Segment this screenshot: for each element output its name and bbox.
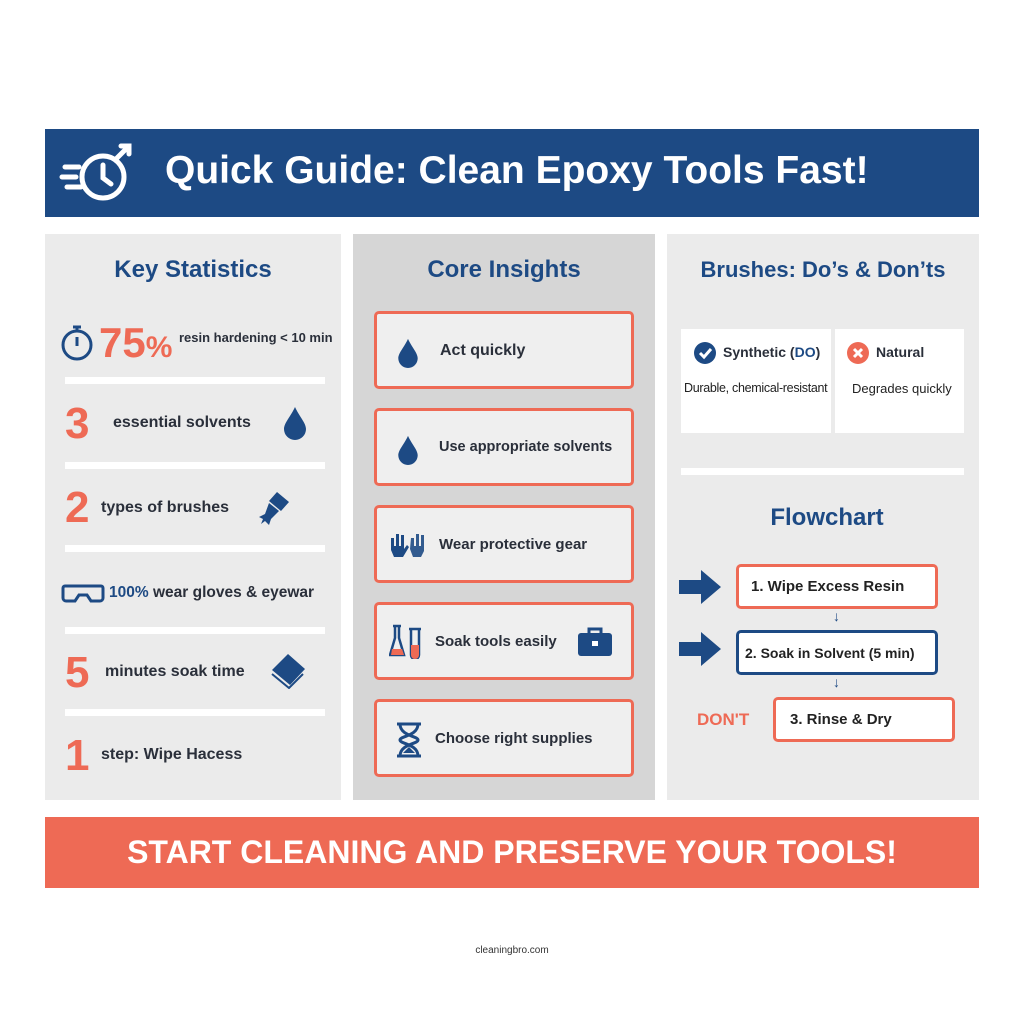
stat 5 minutes bbox=[65, 648, 305, 697]
stat 2 brushes: 2 bbox=[65, 483, 89, 532]
step 1: 1. Wipe Excess Resin bbox=[751, 578, 904, 595]
stat 3 solvents: 3 bbox=[65, 399, 89, 448]
stat 75%: resin hardening < 10 min bbox=[179, 330, 333, 345]
stat 1 step: 1 bbox=[65, 731, 89, 780]
box: natural DON'T bbox=[835, 329, 964, 433]
card: act quickly: Act quickly bbox=[440, 342, 525, 359]
icon: fast clock bbox=[60, 144, 132, 200]
stat 2 brushes: types of brushes bbox=[101, 499, 229, 516]
stat 5 minutes: 5 bbox=[65, 648, 89, 697]
card: solvents: Use appropriate solvents bbox=[439, 439, 612, 455]
header banner bbox=[45, 129, 979, 217]
stat 3 solvents: essential solvents bbox=[113, 414, 251, 431]
flowchart: ↓ bbox=[833, 608, 840, 624]
step 2 bbox=[736, 630, 938, 675]
panel: brushes and flowchart bbox=[667, 234, 979, 800]
box: synthetic DO bbox=[681, 329, 831, 433]
step 3 bbox=[773, 697, 955, 742]
heading: Key Statistics bbox=[114, 256, 272, 283]
box: synthetic DO: Durable, chemical-resistant bbox=[684, 381, 827, 395]
step 1 bbox=[736, 564, 938, 609]
panel: key statistics bbox=[45, 234, 341, 800]
footer banner bbox=[45, 817, 979, 888]
card: protective gear: Wear protective gear bbox=[439, 536, 587, 553]
stat 5 minutes: minutes soak time bbox=[105, 663, 245, 680]
title: Quick Guide: Clean Epoxy Tools Fast! bbox=[165, 149, 869, 192]
flowchart: ↓ bbox=[833, 674, 840, 690]
stat 75% bbox=[62, 319, 333, 366]
heading: Core Insights bbox=[427, 256, 581, 283]
arrow 2 bbox=[679, 632, 721, 666]
arrow 1 bbox=[679, 570, 721, 604]
footer banner: START CLEANING AND PRESERVE YOUR TOOLS! bbox=[127, 834, 897, 870]
panel: core insights bbox=[353, 234, 655, 800]
card: soak tools: Soak tools easily bbox=[435, 633, 557, 650]
stat 75%: 75% bbox=[99, 319, 172, 366]
card: solvents bbox=[374, 408, 634, 486]
card: protective gear bbox=[374, 505, 634, 583]
stat 3 solvents bbox=[65, 399, 306, 448]
stat 100%: 100% wear gloves & eyewar bbox=[109, 584, 314, 601]
stat 1 step bbox=[65, 731, 242, 780]
flowchart heading: Flowchart bbox=[770, 504, 884, 531]
box: natural DON'T: Degrades quickly bbox=[852, 381, 952, 396]
source: cleaningbro.com bbox=[475, 945, 549, 956]
card: supplies bbox=[374, 699, 634, 777]
box: synthetic DO: Synthetic (DO) bbox=[723, 344, 820, 360]
don't label: DON'T bbox=[697, 710, 749, 729]
heading: Brushes: Do’s & Don’ts bbox=[701, 257, 945, 282]
card: act quickly bbox=[374, 311, 634, 389]
step 3: 3. Rinse & Dry bbox=[790, 711, 892, 728]
card: soak tools bbox=[374, 602, 634, 680]
step 2: 2. Soak in Solvent (5 min) bbox=[745, 644, 915, 660]
box: natural DON'T: Natural bbox=[876, 344, 924, 360]
stat 1 step: step: Wipe Hacess bbox=[101, 746, 242, 763]
flowchart bbox=[679, 564, 955, 742]
card: supplies: Choose right supplies bbox=[435, 730, 593, 747]
stat 2 brushes bbox=[65, 483, 289, 532]
